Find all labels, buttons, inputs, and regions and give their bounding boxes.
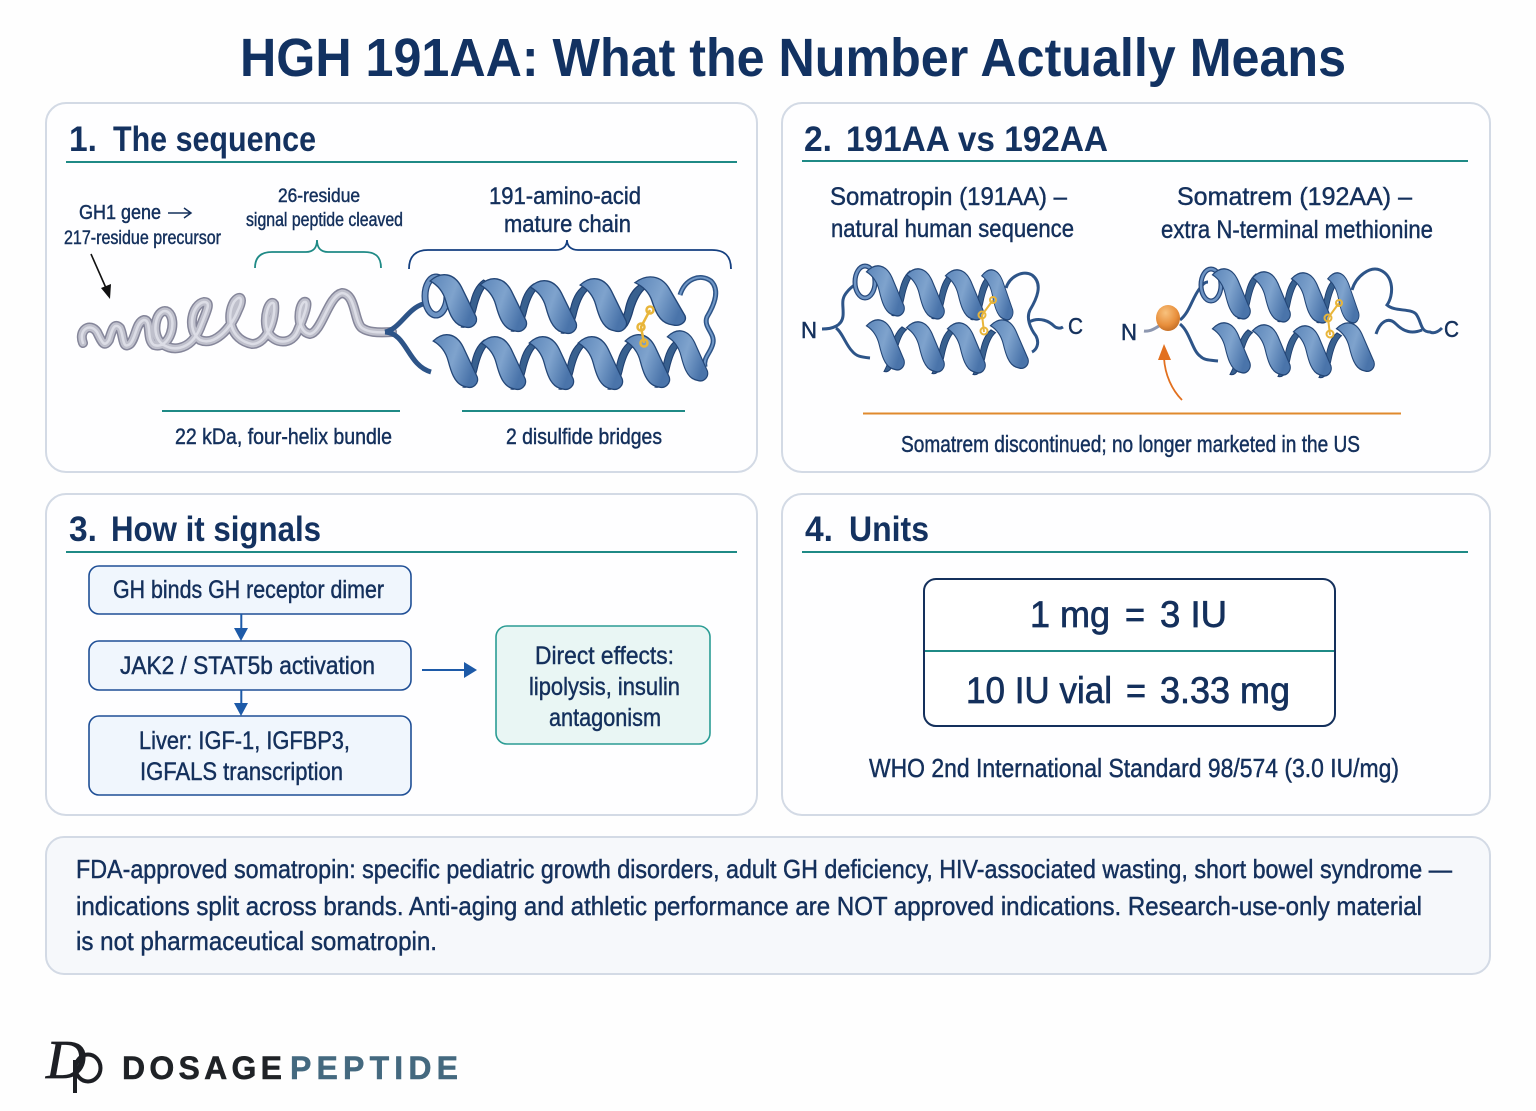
icon: methionine ball [1156, 305, 1180, 331]
callout: direct effects: Direct effects: [535, 642, 674, 670]
caption: somatrem discontinued: Somatrem discontinued; no longer marketed in the US [901, 431, 1360, 457]
arrow: to direct effects [422, 662, 477, 678]
label: mature chain: 191-amino-acid [489, 183, 641, 210]
conversion table: 3 IU [1160, 594, 1227, 635]
arrow: down 1 [234, 614, 248, 641]
flow box: Liver [89, 716, 411, 795]
note: WHO standard: WHO 2nd International Standard 98/574 (3.0 IU/mg) [869, 753, 1399, 783]
arrow: down 2 [234, 690, 248, 716]
label N left: N [801, 317, 817, 343]
label: signal peptide: 26-residue [278, 186, 360, 207]
arrow: orange pointer [1158, 344, 1182, 400]
label N right: N [1121, 319, 1137, 345]
flow box: Liver: Liver: IGF-1, IGFBP3, [139, 727, 350, 755]
heading: how it signals: 3. [69, 510, 97, 549]
flow box: GH binds: GH binds GH receptor dimer [113, 576, 384, 604]
brace: signal peptide [255, 240, 381, 268]
flow box: JAK2: JAK2 / STAT5b activation [120, 652, 375, 680]
arrow: precursor pointer [91, 254, 111, 299]
conversion table [924, 579, 1335, 726]
label: precursor [64, 202, 222, 249]
callout: direct effects: antagonism [549, 704, 661, 732]
logo mark: D [45, 1029, 86, 1090]
label: somatrem: Somatrem (192AA) – [1177, 183, 1412, 211]
title: HGH 191AA: What the Number Actually Means [240, 28, 1346, 88]
protein: mature chain helix bundle [385, 275, 716, 389]
panel: regulatory note: is not pharmaceutical somatropin. [76, 926, 437, 956]
flow box: GH binds [89, 566, 411, 614]
flow box: JAK2 [89, 641, 411, 690]
caption: 22 kDa: 22 kDa, four-helix bundle [175, 424, 392, 449]
protein: somatrem [1201, 269, 1374, 378]
panel: units [782, 494, 1490, 815]
panel: regulatory note [46, 837, 1490, 974]
panel: regulatory note: indications split across brands. Anti-aging and athletic performance are NOT approved indications. Research-use-only material [76, 891, 1422, 921]
label: precursor: 217-residue precursor [64, 228, 222, 249]
wordmark: PEPTIDE: PEPTIDE [290, 1050, 458, 1086]
heading: how it signals: How it signals [111, 510, 321, 549]
callout: direct effects [496, 626, 710, 744]
conversion table: 1 mg [1030, 594, 1110, 635]
heading: 191AA vs 192AA: 2. [804, 120, 832, 159]
panel: the sequence [46, 103, 757, 472]
panel: 191AA vs 192AA [782, 103, 1490, 472]
conversion table: 10 IU vial [966, 670, 1112, 711]
connector strands: somatrem [1180, 269, 1442, 361]
conversion table: 3.33 mg [1160, 670, 1290, 711]
label C left: C [1068, 313, 1083, 339]
label: somatropin line 2: natural human sequence [831, 215, 1074, 243]
heading: the sequence: The sequence [113, 120, 316, 159]
panel: how it signals [46, 494, 757, 815]
label: mature chain line 2: mature chain [504, 211, 631, 238]
callout: direct effects: lipolysis, insulin [529, 673, 680, 701]
methionine tail [1144, 324, 1162, 331]
heading: units: Units [849, 510, 929, 549]
heading: units [805, 510, 929, 549]
label: somatropin: Somatropin (191AA) – [830, 183, 1067, 211]
logo mark [45, 1029, 100, 1093]
label: signal peptide cleaved: signal peptide cleaved [246, 210, 403, 231]
heading: units: 4. [805, 510, 833, 549]
heading: 191AA vs 192AA: 191AA vs 192AA [846, 120, 1108, 159]
label C right: C [1444, 316, 1459, 342]
grey signal peptide coil [82, 293, 392, 348]
caption: disulfide bridges: 2 disulfide bridges [506, 424, 662, 449]
flow box: Liver: IGFALS transcription [140, 758, 343, 786]
logo: DosagePeptide [45, 1029, 458, 1093]
protein: somatropin [855, 266, 1028, 375]
brace: mature chain [409, 240, 731, 269]
heading: the sequence: 1. [69, 120, 97, 159]
wordmark: DOSAGE: DOSAGE [122, 1050, 282, 1086]
label: precursor: GH1 gene [79, 202, 161, 224]
conversion table: = [1125, 594, 1145, 635]
conversion table: = [1126, 670, 1146, 711]
label: somatrem line 2: extra N-terminal methionine [1161, 216, 1433, 244]
connector strands: somatropin [822, 273, 1063, 358]
